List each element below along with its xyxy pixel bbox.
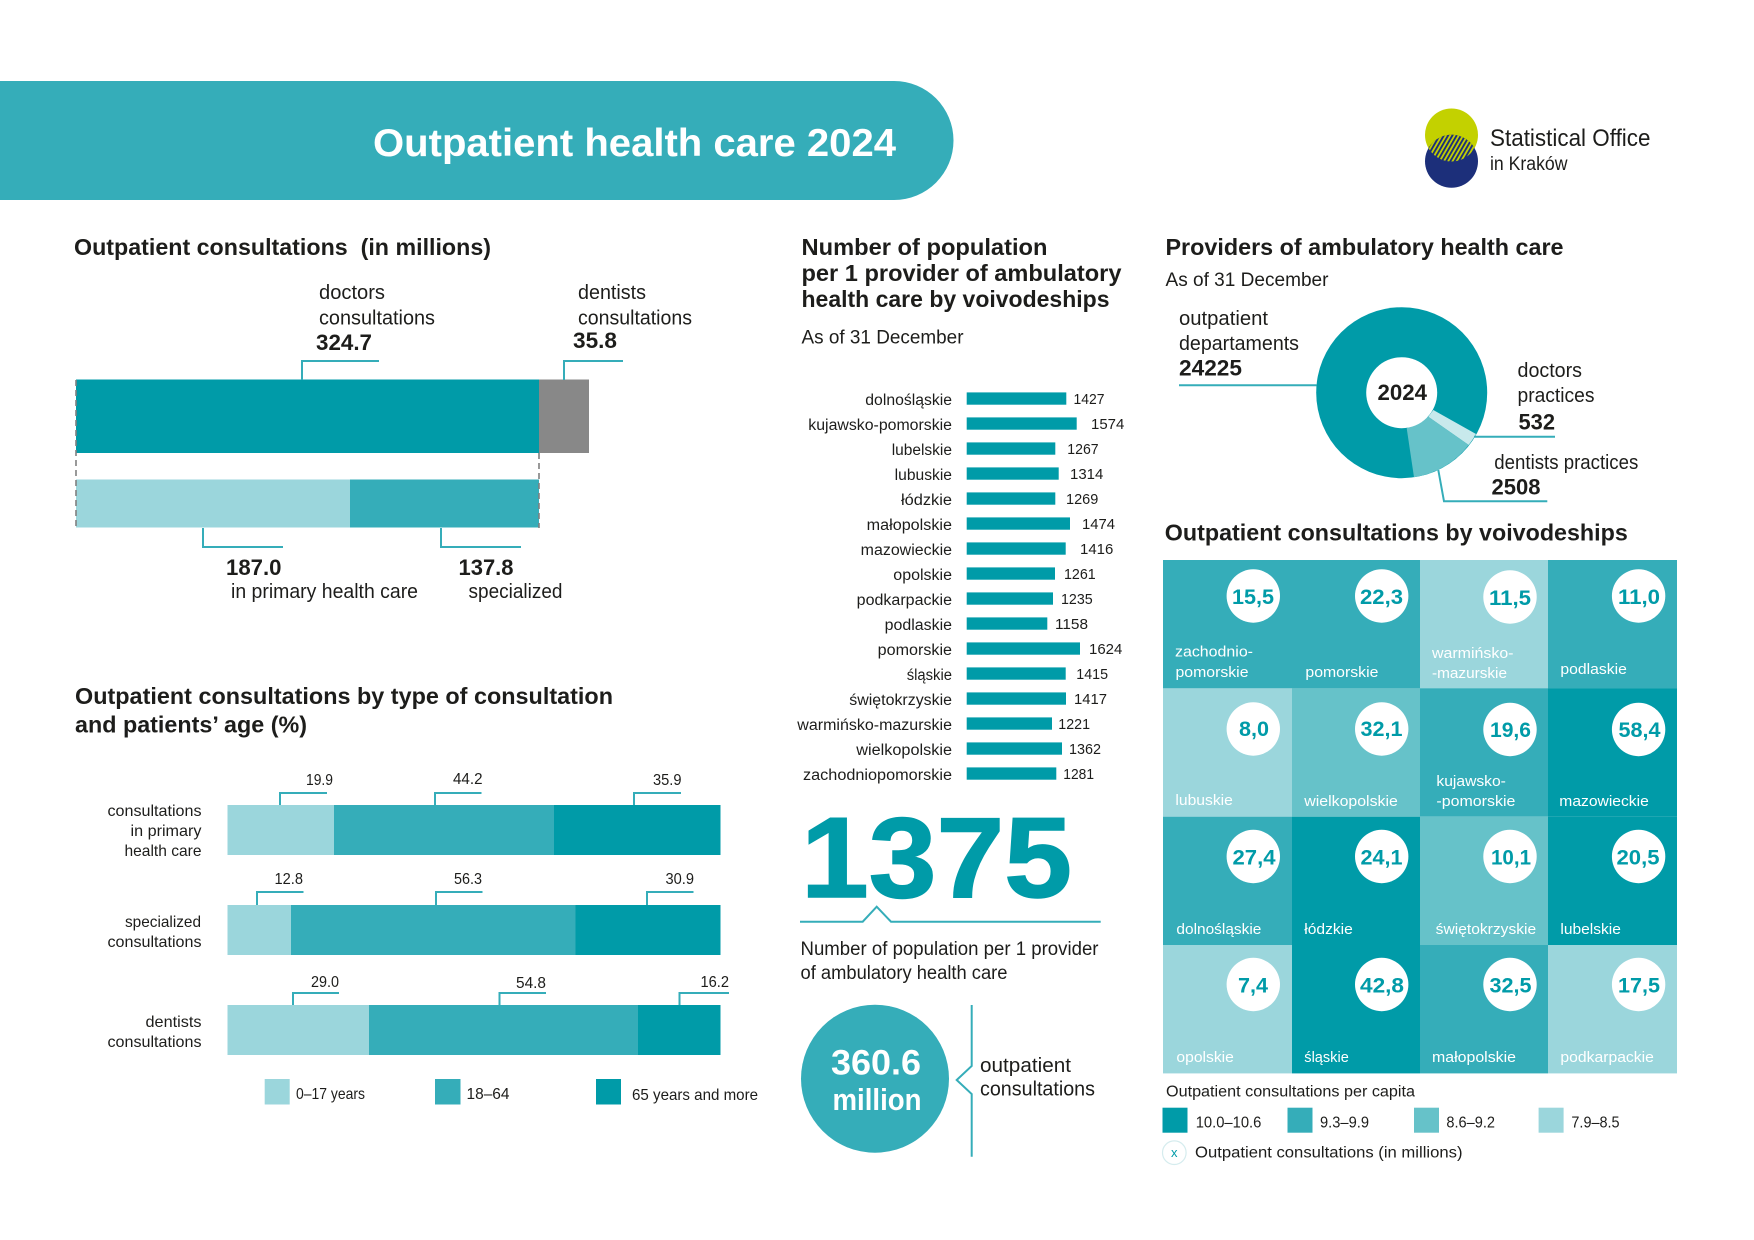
bar chart: population per provider: 1221 xyxy=(1058,716,1090,733)
bar: dentists consultations xyxy=(539,380,589,453)
logo: Statistical Office in Kraków: in Kraków xyxy=(1490,154,1568,175)
bar chart: population per provider: dolnośląskie xyxy=(865,392,952,409)
bar chart: population per provider: 1624 xyxy=(1089,641,1122,658)
subheading: As of 31 December xyxy=(1166,270,1329,291)
bar chart: population per provider: 1416 xyxy=(1080,541,1113,558)
legend: consultations per capita: 8.6–9.2 xyxy=(1446,1114,1495,1131)
stat circle: 360.6 million: million xyxy=(832,1082,922,1117)
label: primary health care xyxy=(226,555,418,603)
tile grid: 22,3 xyxy=(1360,586,1403,609)
legend: consultations per capita: Outpatient consultations per capita xyxy=(1166,1084,1415,1101)
label: dentists consultations xyxy=(573,282,692,353)
text: population per provider description xyxy=(800,939,1099,984)
bar chart: population per provider xyxy=(796,391,1124,784)
tile grid: 27,4 xyxy=(1232,846,1276,870)
bar chart: population per provider: warmińsko-mazurskie xyxy=(796,717,952,734)
tile grid: 11,5 xyxy=(1489,587,1531,610)
tile grid: warmińsko- xyxy=(1431,645,1514,662)
tile grid: 7,4 xyxy=(1238,975,1268,998)
tile grid: mazowieckie xyxy=(1559,793,1649,810)
tile grid: podlaskie xyxy=(1560,661,1627,678)
tile grid: wielkopolskie xyxy=(1303,793,1398,810)
bar chart: population per provider: opolskie xyxy=(893,567,952,584)
bar: specialized xyxy=(350,480,539,528)
stat circle: 360.6 million xyxy=(801,1005,949,1153)
tile grid: 58,4 xyxy=(1618,719,1661,742)
callout pointer line xyxy=(800,907,1101,922)
label: dentists practices: 2508 xyxy=(1492,474,1540,499)
heading: Providers of ambulatory health care xyxy=(1166,234,1564,260)
leader: primary xyxy=(203,528,283,547)
bar chart: population per provider: pomorskie xyxy=(878,642,952,659)
tile grid: 15,5 xyxy=(1232,586,1274,609)
logo: Statistical Office in Kraków: Statistical Office xyxy=(1490,125,1650,152)
tile grid: małopolskie xyxy=(1432,1049,1516,1066)
donut chart xyxy=(1316,307,1487,478)
label: dentists consultations: 35.8 xyxy=(573,328,617,353)
legend: age groups: 18–64 xyxy=(466,1086,510,1103)
stacked bar: primary health care: 44.2 xyxy=(453,771,483,788)
text: population per provider description: of ambulatory health care xyxy=(800,963,1008,984)
bar chart: population per provider: świętokrzyskie xyxy=(849,692,952,709)
legend: consultations per capita: 7.9–8.5 xyxy=(1571,1114,1620,1131)
tile grid: 19,6 xyxy=(1490,719,1531,742)
bar: primary health care xyxy=(76,480,350,528)
logo: Statistical Office in Kraków xyxy=(1425,108,1650,188)
tile grid: 42,8 xyxy=(1360,975,1404,998)
label: primary health care: in primary health care xyxy=(231,581,418,603)
heading: and patients’ age (%) xyxy=(75,712,307,738)
legend: age groups xyxy=(265,1079,758,1104)
row labels: consultations xyxy=(108,1034,202,1051)
label: specialized: specialized xyxy=(468,581,562,603)
bar: doctors consultations xyxy=(76,380,539,453)
label: outpatient departments: departaments xyxy=(1179,333,1299,355)
label: doctors consultations: 324.7 xyxy=(316,330,372,355)
panel: population per provider by voivodeship xyxy=(796,234,1124,1157)
tile grid: 20,5 xyxy=(1616,846,1660,870)
label: dentists consultations: dentists xyxy=(578,282,646,304)
leader: dentists xyxy=(564,361,623,380)
tile grid: pomorskie xyxy=(1176,664,1248,681)
label: outpatient departments: outpatient xyxy=(1179,308,1268,330)
stacked bar: specialized: 12.8 xyxy=(274,871,303,888)
heading: Outpatient consultations by voivodeships xyxy=(1165,520,1628,546)
bar chart: population per provider: 1235 xyxy=(1061,591,1093,608)
row labels: specialized xyxy=(125,914,201,931)
label: dentists consultations: consultations xyxy=(578,308,692,330)
label: doctors practices: practices xyxy=(1518,385,1594,407)
bar chart: population per provider: łódzkie xyxy=(901,492,952,509)
tile grid: -mazurskie xyxy=(1432,665,1507,682)
tile grid: 32,1 xyxy=(1360,718,1403,741)
text: outpatient consultations xyxy=(980,1055,1095,1101)
tile grid: 11,0 xyxy=(1618,586,1660,609)
bar chart: population per provider: 1267 xyxy=(1067,441,1099,458)
bar chart: population per provider: 1314 xyxy=(1070,466,1103,483)
big number 1375: 1375 xyxy=(801,795,1072,922)
heading: health care by voivodeships xyxy=(802,286,1110,312)
leader: doctors xyxy=(302,361,379,380)
subheading: As of 31 December xyxy=(802,328,964,348)
bar chart: population per provider: lubuskie xyxy=(895,467,952,484)
stacked bar: specialized: 56.3 xyxy=(454,871,482,888)
tile grid: zachodnio- xyxy=(1175,644,1253,661)
row labels: in primary xyxy=(130,823,202,840)
tile grid: dolnośląskie xyxy=(1176,921,1261,938)
bar chart: population per provider: lubelskie xyxy=(892,442,952,459)
legend: consultations per capita: Outpatient consultations (in millions) xyxy=(1195,1145,1462,1162)
bar chart: population per provider: 1474 xyxy=(1082,516,1115,533)
panel: consultations by voivodeships xyxy=(1162,520,1677,1164)
stacked bar: specialized: 30.9 xyxy=(666,871,694,888)
tile grid: 10,1 xyxy=(1491,846,1531,870)
tile grid: podkarpackie xyxy=(1560,1049,1654,1066)
bar chart: population per provider: śląskie xyxy=(907,667,952,684)
row labels: consultations xyxy=(108,934,202,951)
tile grid: 8,0 xyxy=(1239,718,1269,741)
label: doctors practices xyxy=(1518,360,1594,434)
label: specialized xyxy=(458,555,562,603)
tile grid: lubuskie xyxy=(1175,792,1233,809)
leader: specialized xyxy=(441,528,521,547)
label: doctors consultations xyxy=(316,282,435,355)
tile grid: 32,5 xyxy=(1490,975,1532,998)
bar chart: population per provider: kujawsko-pomorskie xyxy=(808,417,952,434)
bar chart: population per provider: 1417 xyxy=(1074,691,1107,708)
heading: Outpatient consultations by type of consultation xyxy=(75,683,613,709)
legend: consultations per capita xyxy=(1162,1084,1620,1164)
text: outpatient consultations: outpatient xyxy=(980,1055,1071,1077)
bar chart: population per provider: 1574 xyxy=(1091,416,1124,433)
label: doctors consultations: doctors xyxy=(319,282,385,304)
heading: per 1 provider of ambulatory xyxy=(802,260,1122,286)
bar chart: population per provider: podlaskie xyxy=(885,617,952,634)
legend: age groups: 65 years and more xyxy=(632,1087,758,1104)
stacked bar: primary health care: 35.9 xyxy=(653,772,682,789)
bar chart: population per provider: małopolskie xyxy=(867,517,952,534)
bar chart: population per provider: 1415 xyxy=(1076,666,1108,683)
stacked bar: dentists: 29.0 xyxy=(311,974,339,991)
panel: consultations by type and age xyxy=(75,683,758,1104)
tile grid: -pomorskie xyxy=(1436,793,1515,810)
label: specialized: 137.8 xyxy=(458,555,514,580)
heading xyxy=(802,234,1122,312)
bar chart: population per provider: 1269 xyxy=(1066,491,1098,508)
label: outpatient departments: 24225 xyxy=(1179,356,1242,381)
tile grid: śląskie xyxy=(1304,1049,1349,1066)
tile grid: kujawsko- xyxy=(1436,773,1506,790)
label: primary health care: 187.0 xyxy=(226,555,282,580)
label: dentists practices: dentists practices xyxy=(1494,452,1638,474)
tile grid: 17,5 xyxy=(1618,975,1660,998)
heading: Number of population xyxy=(802,234,1048,260)
legend: consultations per capita: 9.3–9.9 xyxy=(1320,1114,1369,1131)
bar chart: population per provider: 1427 xyxy=(1074,391,1104,408)
bar chart: population per provider: 1261 xyxy=(1064,566,1096,583)
legend: consultations per capita: 10.0–10.6 xyxy=(1196,1114,1261,1131)
stacked bar: dentists xyxy=(228,974,729,1055)
stacked bar: specialized xyxy=(228,871,720,955)
row labels xyxy=(108,803,202,1051)
stacked bar: primary health care xyxy=(228,771,720,855)
bar chart: population per provider: 1281 xyxy=(1063,766,1094,783)
leader: dentists practices xyxy=(1438,470,1547,501)
tile grid: pomorskie xyxy=(1305,664,1378,681)
donut chart: 2024 xyxy=(1378,380,1428,405)
heading: Outpatient consultations (in millions) xyxy=(74,234,491,260)
leader: doctors practices xyxy=(1474,436,1555,438)
bar chart: population per provider: podkarpackie xyxy=(857,592,952,609)
label: outpatient departments xyxy=(1179,308,1299,381)
tile grid: łódzkie xyxy=(1304,921,1353,938)
stacked bar: primary health care: 19.9 xyxy=(306,772,333,789)
tile grid: opolskie xyxy=(1176,1049,1234,1066)
bar chart: population per provider: zachodniopomorskie xyxy=(803,767,952,784)
text: outpatient consultations: consultations xyxy=(980,1079,1095,1101)
bar chart: population per provider: 1362 xyxy=(1069,741,1101,758)
row labels: health care xyxy=(124,843,202,860)
title banner xyxy=(0,81,954,200)
stat circle: 360.6 million: 360.6 xyxy=(831,1044,921,1082)
title: Outpatient health care 2024 xyxy=(373,122,896,165)
stacked bar: dentists: 54.8 xyxy=(516,975,546,992)
row labels: consultations xyxy=(108,803,202,820)
tile grid: świętokrzyskie xyxy=(1436,921,1536,938)
tile grid xyxy=(1163,560,1677,1073)
label: doctors consultations: consultations xyxy=(319,308,435,330)
tile grid: lubelskie xyxy=(1560,921,1621,938)
row labels: dentists xyxy=(146,1014,202,1031)
legend: consultations per capita: x xyxy=(1171,1145,1178,1160)
bracket xyxy=(957,1005,972,1157)
label: dentists practices xyxy=(1492,452,1638,499)
text: population per provider description: Number of population per 1 provider xyxy=(800,939,1099,960)
stacked bar: dentists: 16.2 xyxy=(700,974,729,991)
bar chart: population per provider: 1158 xyxy=(1055,616,1088,633)
panel: providers of ambulatory health care xyxy=(1166,234,1638,501)
panel: outpatient consultations in millions xyxy=(74,234,692,603)
leader: outpatient departments xyxy=(1179,384,1316,386)
bar chart: population per provider: mazowieckie xyxy=(861,542,952,559)
bar chart: population per provider: wielkopolskie xyxy=(855,742,952,759)
tile grid: 24,1 xyxy=(1360,846,1403,870)
legend: age groups: 0–17 years xyxy=(296,1086,365,1103)
heading xyxy=(75,683,613,738)
label: doctors practices: doctors xyxy=(1518,360,1582,382)
label: doctors practices: 532 xyxy=(1518,410,1555,434)
